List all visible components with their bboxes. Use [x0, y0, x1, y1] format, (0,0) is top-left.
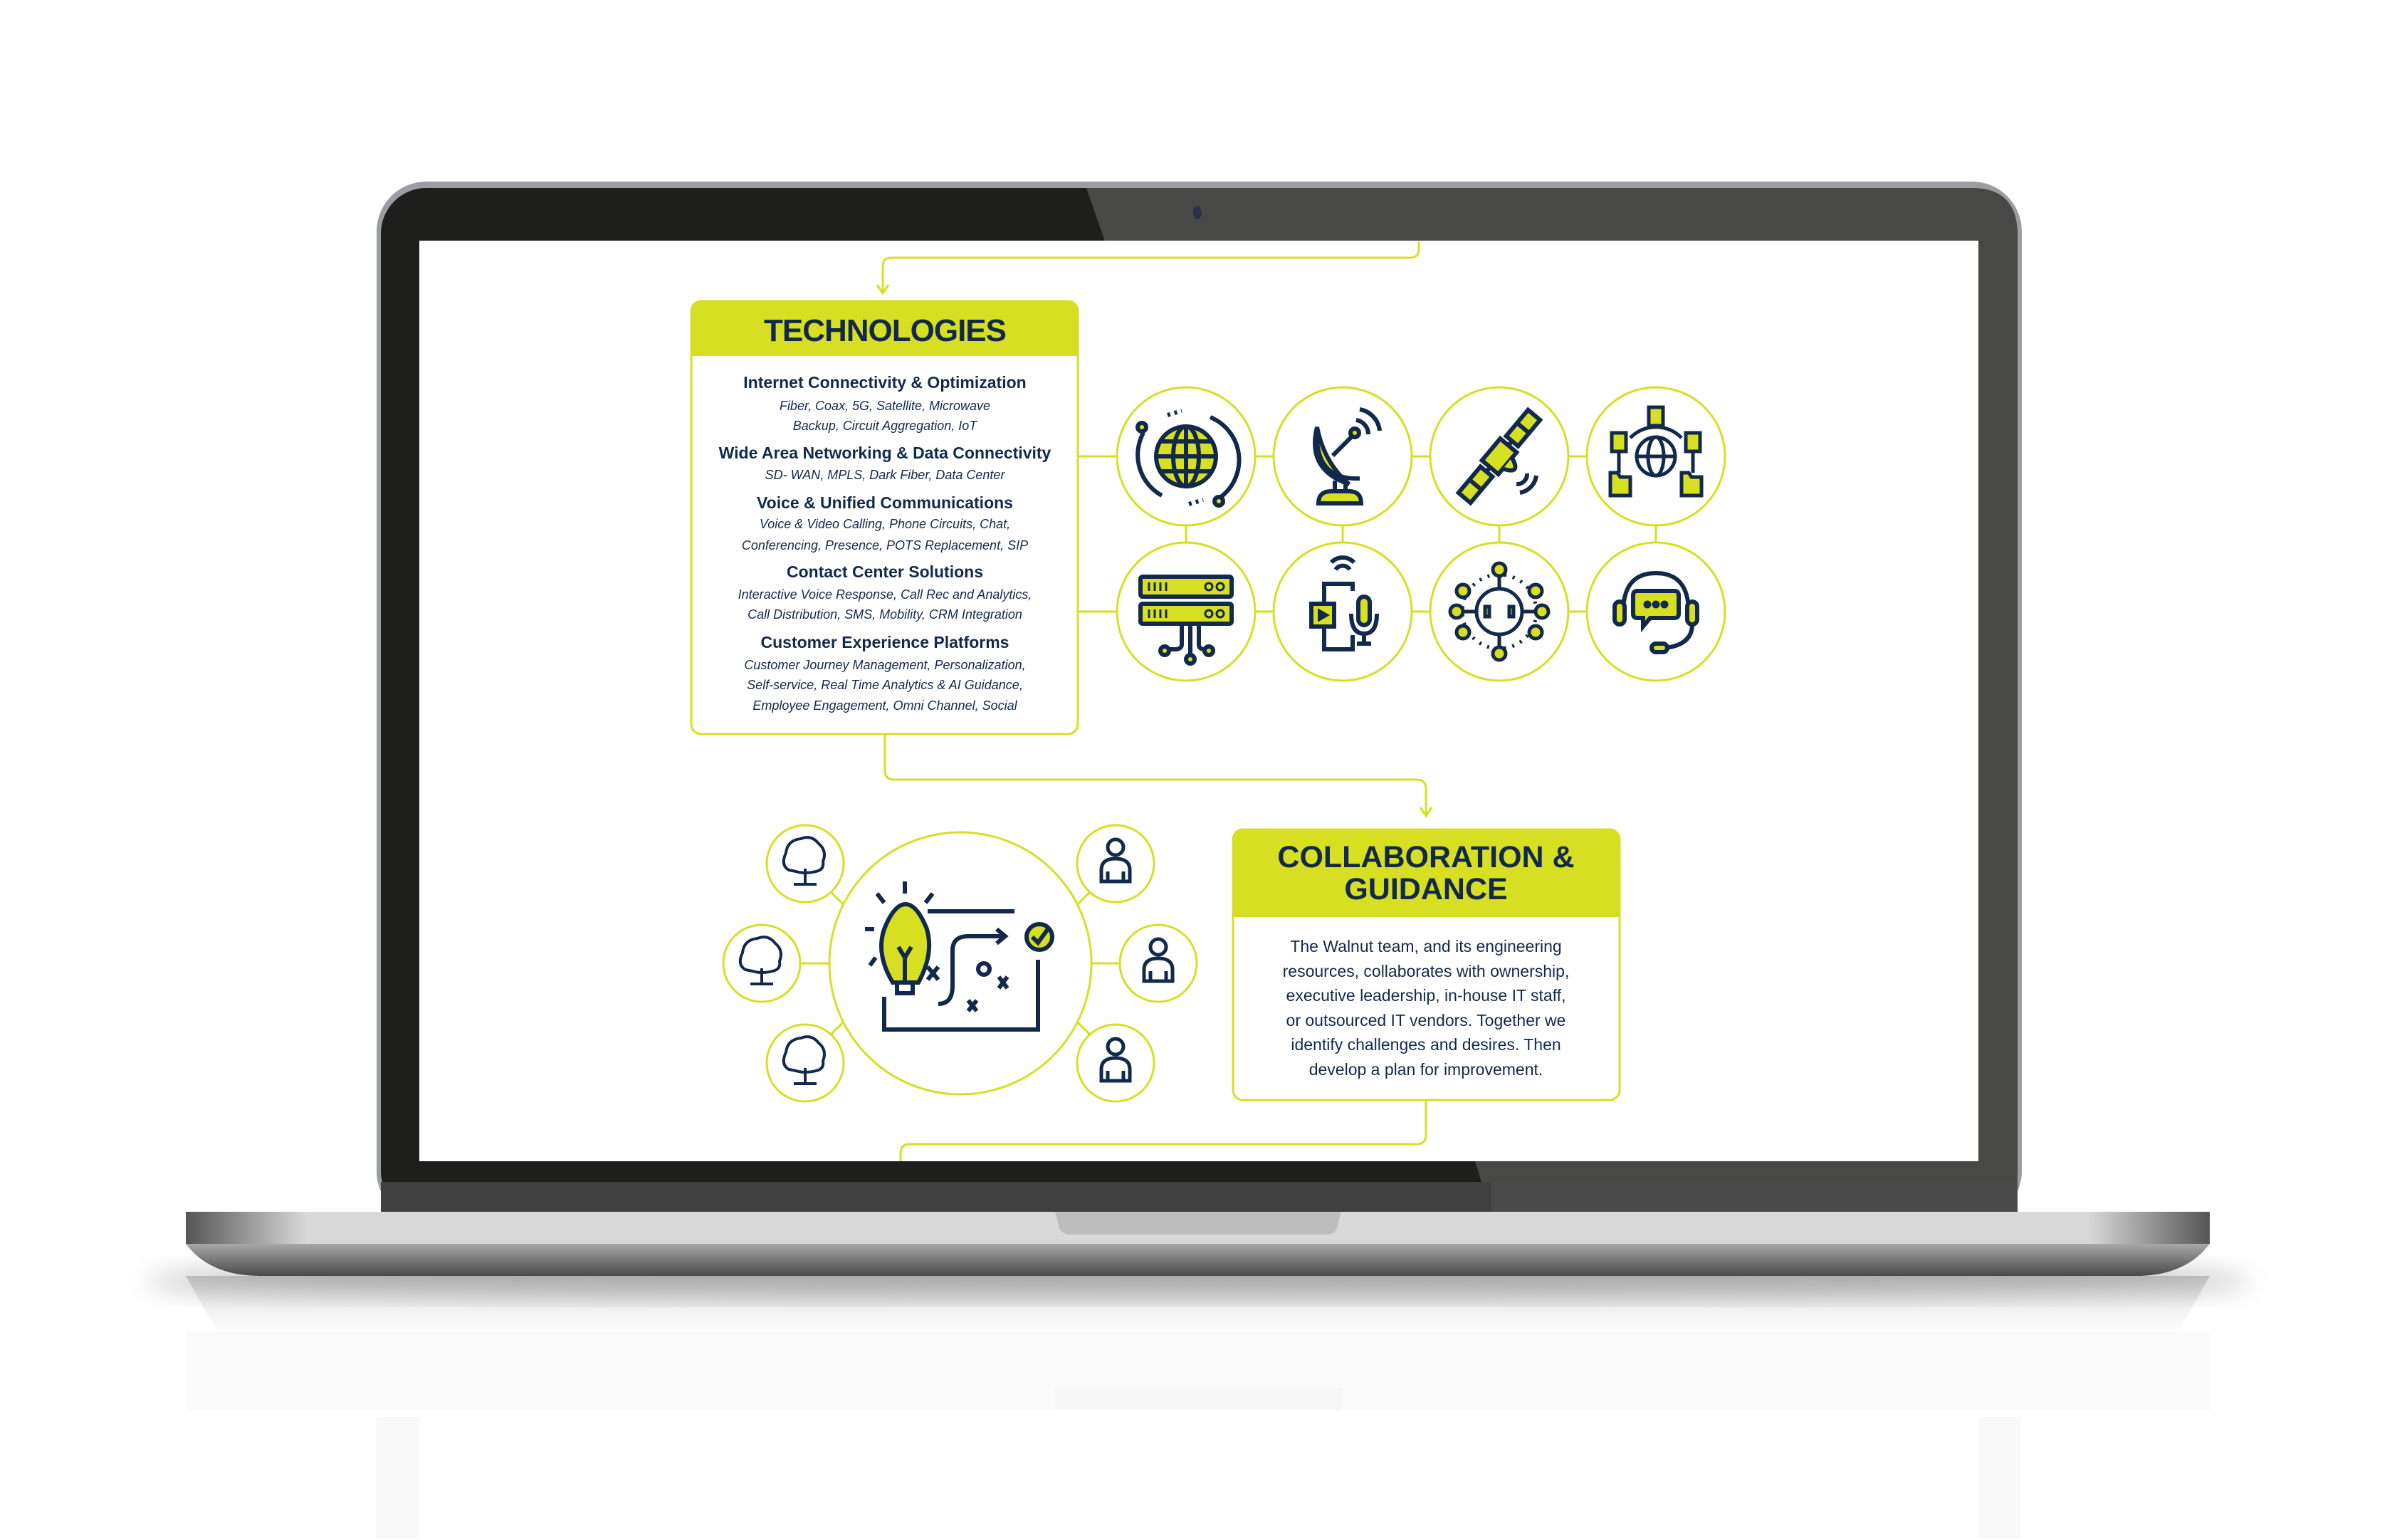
text block: technology list: Backup, Circuit Aggregation, IoT	[793, 419, 978, 433]
icon: satellite dish	[1274, 387, 1412, 525]
text block: collaboration description: develop a plan for improvement.	[1309, 1060, 1543, 1079]
icon: globe with orbit	[1117, 387, 1255, 525]
icon: camera	[1193, 206, 1202, 219]
icon grid connectors	[1078, 456, 1656, 612]
text block: technology list: Voice & Unified Communications	[757, 493, 1013, 512]
icon: satellite	[1430, 387, 1568, 525]
big circle with strategy icon	[829, 832, 1091, 1094]
icon: phone and microphone	[1274, 543, 1412, 681]
text block: collaboration description: or outsourced IT vendors. Together we	[1286, 1011, 1565, 1030]
heading: collaboration & guidance: GUIDANCE	[1344, 872, 1508, 906]
text block: collaboration description: identify challenges and desires. Then	[1291, 1035, 1561, 1054]
laptop shadow and reflection	[145, 1260, 2252, 1538]
arrow: top connector	[877, 241, 1419, 293]
icon: people	[1077, 825, 1197, 1101]
screen	[419, 241, 1978, 1161]
arrow: bottom connector	[901, 1100, 1426, 1161]
text block: technology list: Interactive Voice Response, Call Rec and Analytics,	[738, 587, 1032, 602]
text block: technology list: Wide Area Networking & Data Connectivity	[719, 444, 1051, 462]
panel: technologies	[691, 301, 1078, 734]
text block: technology list: SD- WAN, MPLS, Dark Fiber, Data Center	[765, 468, 1005, 482]
icon: network globe	[1587, 387, 1725, 525]
text block: technology list: Employee Engagement, Omni Channel, Social	[752, 698, 1018, 713]
laptop base	[186, 1212, 2210, 1276]
text block: technology list	[719, 373, 1051, 713]
icon: support hub	[1430, 543, 1568, 681]
text block: technology list: Call Distribution, SMS, Mobility, CRM Integration	[748, 607, 1022, 622]
text block: technology list: Self-service, Real Time Analytics & AI Guidance,	[747, 678, 1023, 692]
laptop lid bezel	[377, 182, 2022, 1221]
heading: collaboration & guidance	[1233, 829, 1620, 917]
text block: collaboration description: The Walnut team, and its engineering	[1290, 937, 1562, 955]
text block: technology list: Internet Connectivity & Optimization	[743, 373, 1027, 392]
text block: technology list: Voice & Video Calling, Phone Circuits, Chat,	[760, 517, 1010, 531]
text block: technology list: Customer Experience Platforms	[761, 633, 1009, 651]
diagram: collaboration hub	[723, 825, 1197, 1101]
icon: servers	[1117, 543, 1255, 681]
heading: collaboration & guidance: COLLABORATION &	[1277, 840, 1575, 874]
heading: technologies: TECHNOLOGIES	[764, 313, 1006, 348]
arrow: middle connector	[885, 735, 1432, 816]
icon: headset chat	[1587, 543, 1725, 681]
text block: collaboration description: executive leadership, in-house IT staff,	[1286, 986, 1565, 1005]
connectors	[800, 892, 1120, 1034]
text block: technology list: Fiber, Coax, 5G, Satellite, Microwave	[780, 399, 990, 413]
text block: technology list: Contact Center Solutions	[787, 562, 983, 581]
text block: technology list: Conferencing, Presence, POTS Replacement, SIP	[742, 538, 1028, 552]
heading: technologies	[691, 301, 1078, 356]
text block: collaboration description	[1283, 937, 1569, 1079]
text block: technology list: Customer Journey Management, Personalization,	[744, 658, 1026, 672]
text block: collaboration description: resources, collaborates with ownership,	[1283, 962, 1569, 980]
icon: trees	[723, 825, 844, 1101]
panel: collaboration & guidance	[1233, 829, 1620, 1100]
